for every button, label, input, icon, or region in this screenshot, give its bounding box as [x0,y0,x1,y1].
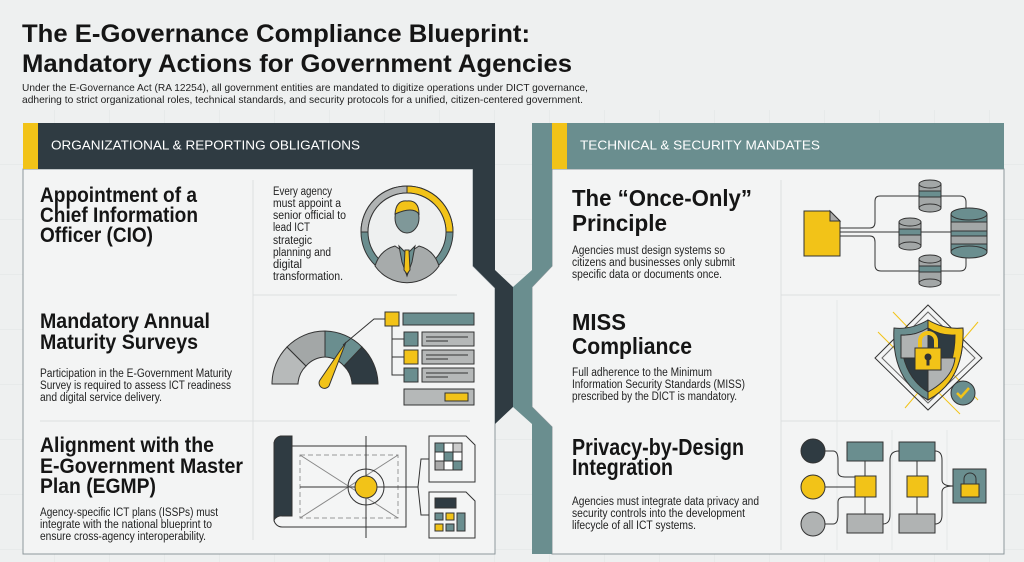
item: MISS compliance: MISS [572,309,626,335]
item: EGMP alignment: ensure cross-agency interoperability. [40,531,206,543]
item: privacy by design: Integration [572,454,673,480]
item: MISS compliance: Information Security Standards (MISS) [572,379,745,391]
title [22,20,572,78]
item: CIO: planning and [273,247,331,259]
item: CIO: transformation. [273,271,343,283]
item: CIO: lead ICT [273,222,310,234]
subtitle: adhering to strict organizational roles, technical standards, and security protocols for a unified, citizen-centered government. [22,94,583,106]
item: once-only principle: The “Once-Only” [572,185,752,211]
title: The E-Governance Compliance Blueprint: [22,20,530,48]
item: MISS compliance: prescribed by the DICT is mandatory. [572,391,737,403]
item: CIO: must appoint a [273,198,342,210]
item: maturity surveys: Mandatory Annual [40,310,210,333]
item: once-only principle: specific data or documents once. [572,269,722,281]
item: CIO: digital [273,259,302,271]
icon: CIO person [361,186,453,283]
item: CIO: Appointment of a [40,184,197,207]
item: privacy by design: Privacy-by-Design [572,434,744,460]
item: CIO: Chief Information [40,204,198,227]
title: Mandatory Actions for Government Agencies [22,50,572,78]
item: maturity surveys: Survey is required to assess ICT readiness [40,380,231,392]
header: technical: TECHNICAL & SECURITY MANDATES [580,138,820,152]
item: once-only principle: Agencies must design systems so [572,245,725,257]
item: privacy by design: security controls into the development [572,508,746,520]
item: maturity surveys: Maturity Surveys [40,331,198,354]
item: once-only principle: citizens and businesses only submit [572,257,736,269]
icon: gauge and checklist [272,312,474,405]
item: EGMP alignment: integrate with the national blueprint to [40,519,212,531]
item: MISS compliance: Full adherence to the Minimum [572,367,712,379]
item: MISS compliance [572,305,982,414]
item: CIO [40,184,453,283]
item: privacy by design: lifecycle of all ICT systems. [572,520,696,532]
icon: document to databases [804,180,987,287]
item: privacy by design: Agencies must integrate data privacy and [572,496,759,508]
item: CIO: strategic [273,235,312,247]
item: EGMP alignment: E-Government Master [40,455,243,478]
subtitle: Under the E-Governance Act (RA 12254), all government entities are mandated to digitize operations under DICT governance, [22,82,588,94]
item: maturity surveys: Participation in the E-Government Maturity [40,368,232,380]
item: EGMP alignment: Alignment with the [40,434,214,457]
item: CIO: Every agency [273,186,332,198]
item: EGMP alignment: Plan (EGMP) [40,475,156,498]
item: once-only principle [572,180,987,287]
subtitle [22,82,588,106]
item: privacy by design [572,434,986,536]
item: CIO: Officer (CIO) [40,224,153,247]
panel: organizational & reporting obligations [23,123,513,554]
icon: blueprint [274,436,475,538]
item: CIO: senior official to [273,210,346,222]
item: maturity surveys: and digital service delivery. [40,392,162,404]
item: maturity surveys [40,310,474,405]
panel: technical & security mandates [513,123,1004,554]
item: EGMP alignment [40,434,475,543]
icon: shield with lock [875,305,982,414]
header: organizational: ORGANIZATIONAL & REPORTING OBLIGATIONS [51,138,360,152]
item: EGMP alignment: Agency-specific ICT plans (ISSPs) must [40,507,219,519]
item: MISS compliance: Compliance [572,333,692,359]
item: once-only principle: Principle [572,210,667,236]
icon: privacy flow diagram [801,439,986,536]
